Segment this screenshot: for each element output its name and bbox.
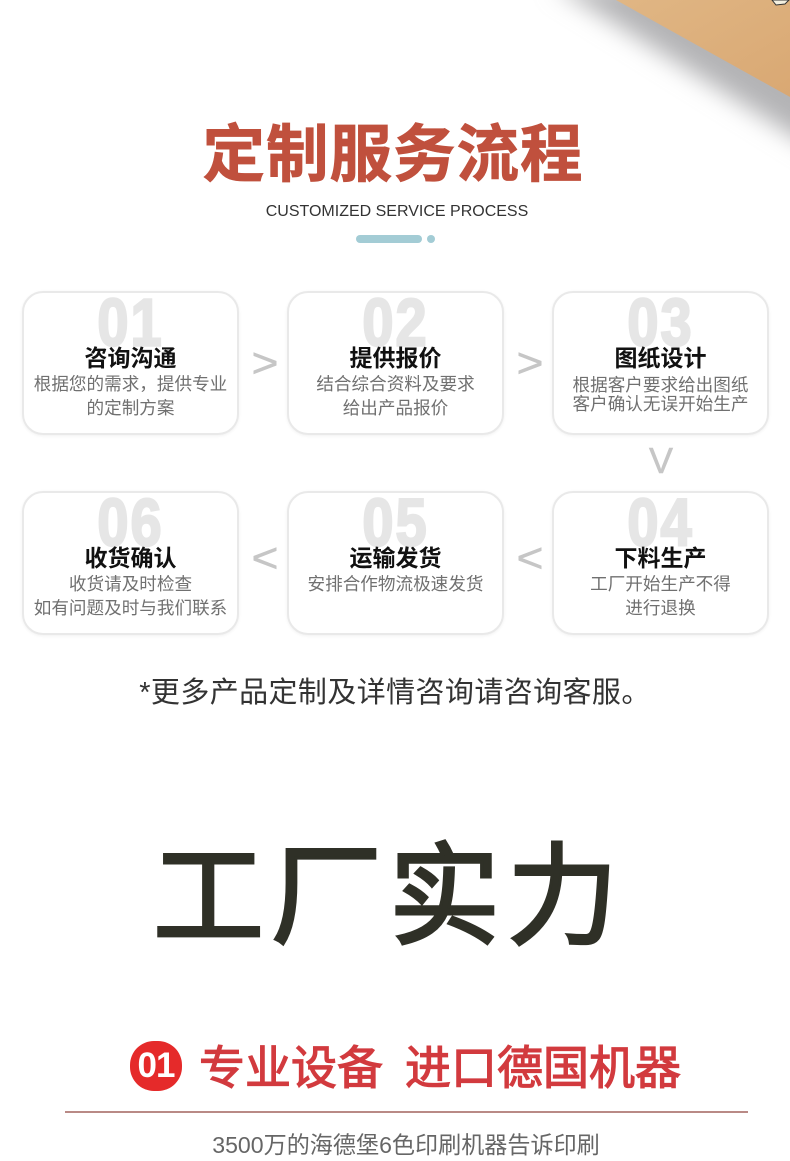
- arrow: 02 to 03: >: [517, 339, 543, 386]
- arrow: 04 to 05: <: [517, 534, 543, 581]
- panel: step 03: [552, 291, 769, 435]
- panel: step 04: 下料生产: [614, 545, 706, 571]
- divider line: [65, 1111, 748, 1113]
- panel: step 01: 咨询沟通: [84, 345, 176, 371]
- panel: step 04: 进行退换: [625, 598, 696, 618]
- subtitle: CUSTOMIZED SERVICE PROCESS: [266, 203, 528, 220]
- panel: step 06: 收货请及时检查: [69, 574, 192, 594]
- arrow: 01 to 02: >: [252, 339, 278, 386]
- panel: step 04: [552, 491, 769, 635]
- panel: step 02: [287, 291, 504, 435]
- section heading: factory strength: 工厂实力: [153, 835, 625, 959]
- subheading: professional equipment: 专业设备 进口德国机器: [199, 1042, 681, 1094]
- panel: step 03: 图纸设计: [614, 345, 706, 371]
- panel: step 01: [22, 291, 239, 435]
- panel: step 04: 工厂开始生产不得: [590, 574, 731, 594]
- panel: step 06: 如有问题及时与我们联系: [34, 598, 227, 618]
- arrow: 03 to 04: V: [649, 440, 673, 481]
- panel: step 06: [22, 491, 239, 635]
- panel: step 05: 安排合作物流极速发货: [308, 574, 483, 594]
- panel: step 06: 收货确认: [84, 545, 176, 571]
- panel: step 01: 根据您的需求，提供专业: [34, 374, 227, 394]
- panel: step 03: 客户确认无误开始生产: [573, 394, 748, 414]
- panel: step 02: 结合综合资料及要求: [316, 374, 475, 394]
- panel: step 01: 的定制方案: [86, 398, 174, 418]
- title: 定制服务流程: [202, 120, 584, 190]
- note text: *更多产品定制及详情咨询请咨询客服。: [139, 677, 651, 709]
- arrow: 05 to 06: <: [252, 534, 278, 581]
- panel: step 05: 运输发货: [350, 545, 442, 571]
- title accent: bar and dot: [356, 235, 435, 243]
- badge: 01: [130, 1041, 182, 1091]
- caption: 3500万的海德堡6色印刷机器告诉印刷: [212, 1132, 600, 1158]
- badge: 01: 01: [138, 1046, 174, 1085]
- panel: step 02: 提供报价: [350, 345, 442, 371]
- panel: step 02: 给出产品报价: [343, 398, 448, 418]
- decorative corner: kraft paper with shadow: [558, 0, 790, 150]
- panel: step 03: 根据客户要求给出图纸: [573, 375, 748, 395]
- panel: step 05: [287, 491, 504, 635]
